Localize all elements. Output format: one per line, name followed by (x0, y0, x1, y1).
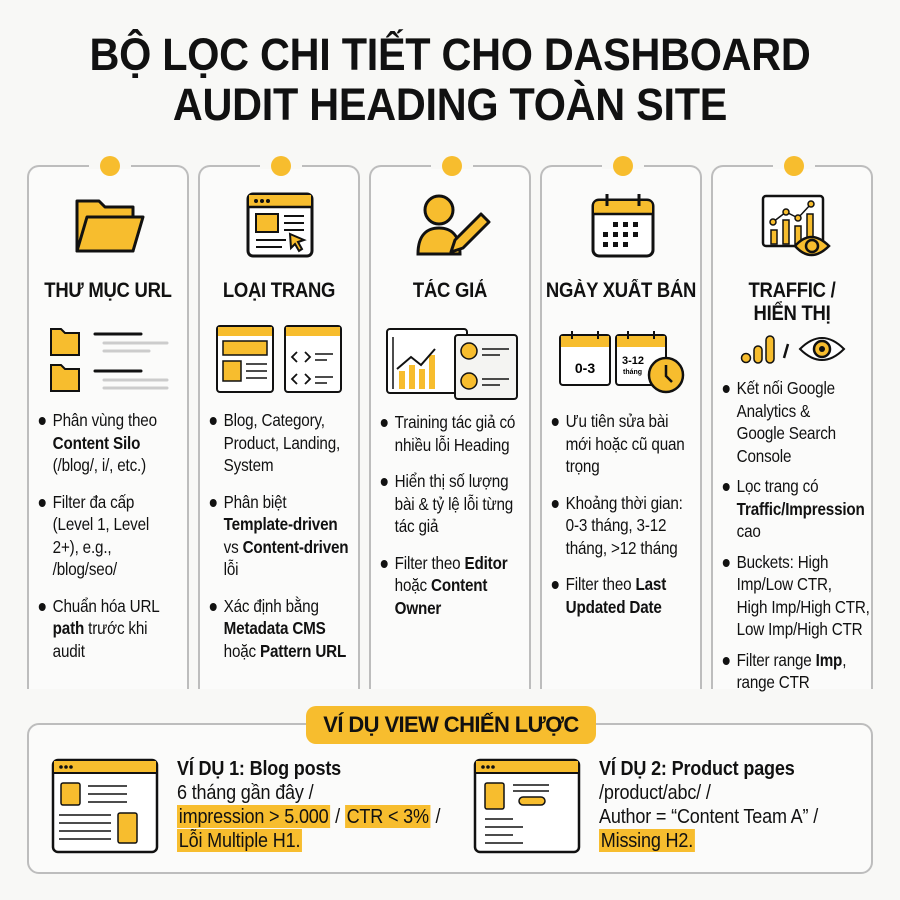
bullets: Buckets: High (737, 552, 828, 572)
heading: HIỂN THỊ (754, 302, 830, 325)
bullets (380, 412, 515, 618)
icon: folder list (50, 328, 168, 392)
text: example 2: Missing H2. (601, 829, 693, 852)
icon: chart with eye (762, 194, 831, 256)
bullets: Filter theo Last Updated Date (566, 574, 666, 616)
icon: date range calendars (559, 331, 684, 394)
bullets (722, 378, 870, 692)
bullets (552, 411, 685, 616)
bullets: Hiển thị số lượng bài & tỷ lệ lỗi từng tác giả (395, 471, 513, 536)
text: example 1 (177, 757, 440, 852)
text: example 1: impression > 5.000 / CTR < 3% / (179, 805, 440, 828)
panel: traffic / hiển thị (711, 165, 873, 689)
bullets (38, 410, 160, 660)
panel: ví dụ view chiến lược (27, 723, 873, 874)
pill heading (306, 706, 596, 744)
bullets: Chuẩn hóa URL path trước khi audit (53, 596, 159, 660)
icon: chart and profile cards (386, 328, 518, 400)
heading (748, 279, 836, 325)
bullets: Imp/Low CTR, (737, 574, 832, 594)
title (89, 29, 811, 130)
bullets: High Imp/High CTR, (737, 596, 870, 616)
icon: signal / eye (740, 335, 846, 364)
bullets: Kết nối Google (737, 378, 835, 398)
text: example 1: Lỗi Multiple H1. (179, 829, 300, 852)
title: BỘ LỌC CHI TIẾT CHO DASHBOARD (89, 29, 811, 80)
heading: LOẠI TRANG (223, 279, 335, 302)
bullets: Filter range Imp, (737, 650, 846, 670)
bullets (210, 410, 348, 660)
icon: blog browser (52, 758, 158, 854)
icon: product browser (474, 758, 580, 854)
heading: THƯ MỤC URL (44, 279, 172, 302)
bullets: Phân vùng theo Content Silo (/blog/, i/, etc.) (53, 410, 157, 475)
text: example 1: VÍ DỤ 1: Blog posts (177, 757, 341, 780)
icon: date range calendars: 0-3 (575, 360, 595, 376)
heading: NGÀY XUẤT BẢN (546, 279, 696, 302)
bullets: cao (737, 521, 761, 541)
bullets: Traffic/Impression (737, 498, 865, 518)
pill heading: VÍ DỤ VIEW CHIẾN LƯỢC (323, 712, 579, 737)
icon: date range calendars: 3-12 (622, 355, 644, 367)
heading: TÁC GIẢ (413, 279, 487, 302)
bullets: Lọc trang có (737, 476, 818, 496)
bullets: range CTR (737, 672, 810, 692)
bullets: Filter theo Editor hoặc Content Owner (395, 552, 507, 618)
bullets: Google Search (737, 423, 836, 443)
panel: thư mục url (27, 165, 189, 689)
panel: ngày xuất bản (540, 165, 702, 689)
panel: tác giả (369, 165, 531, 689)
bullets: Filter đa cấp (Level 1, Level 2+), e.g., /blog/seo/ (53, 492, 149, 579)
icon: author with pencil (416, 194, 491, 256)
heading: TRAFFIC / (749, 279, 835, 302)
icon: calendar (592, 194, 654, 258)
icon: date range calendars: tháng (623, 369, 642, 376)
icon: browser with cursor (246, 192, 314, 258)
bullets: Xác định bằng Metadata CMS hoặc Pattern URL (224, 596, 346, 660)
text: example 2: /product/abc/ / (599, 781, 711, 804)
panel: loại trang (198, 165, 360, 689)
bullets: Ưu tiên sửa bài mới hoặc cũ quan trọng (566, 411, 685, 476)
bullets: Training tác giả có nhiều lỗi Heading (395, 412, 515, 454)
icon: templates (216, 325, 342, 393)
icon: folder (76, 200, 144, 252)
bullets: Phân biệt Template-driven vs Content-driven lỗi (224, 492, 348, 579)
bullets: Console (737, 446, 791, 466)
text: example 2 (599, 757, 818, 852)
text: example 2: VÍ DỤ 2: Product pages (599, 757, 795, 780)
bullets: Analytics & (737, 400, 810, 420)
text: example 2: Author = “Content Team A” / (599, 805, 818, 828)
title: AUDIT HEADING TOÀN SITE (173, 79, 727, 130)
bullets: Blog, Category, Product, Landing, System (224, 410, 340, 475)
bullets: Low Imp/High CTR (737, 619, 862, 639)
text: example 1: 6 tháng gần đây / (177, 781, 313, 804)
bullets: Khoảng thời gian: 0-3 tháng, 3-12 tháng, >12 tháng (566, 492, 683, 558)
